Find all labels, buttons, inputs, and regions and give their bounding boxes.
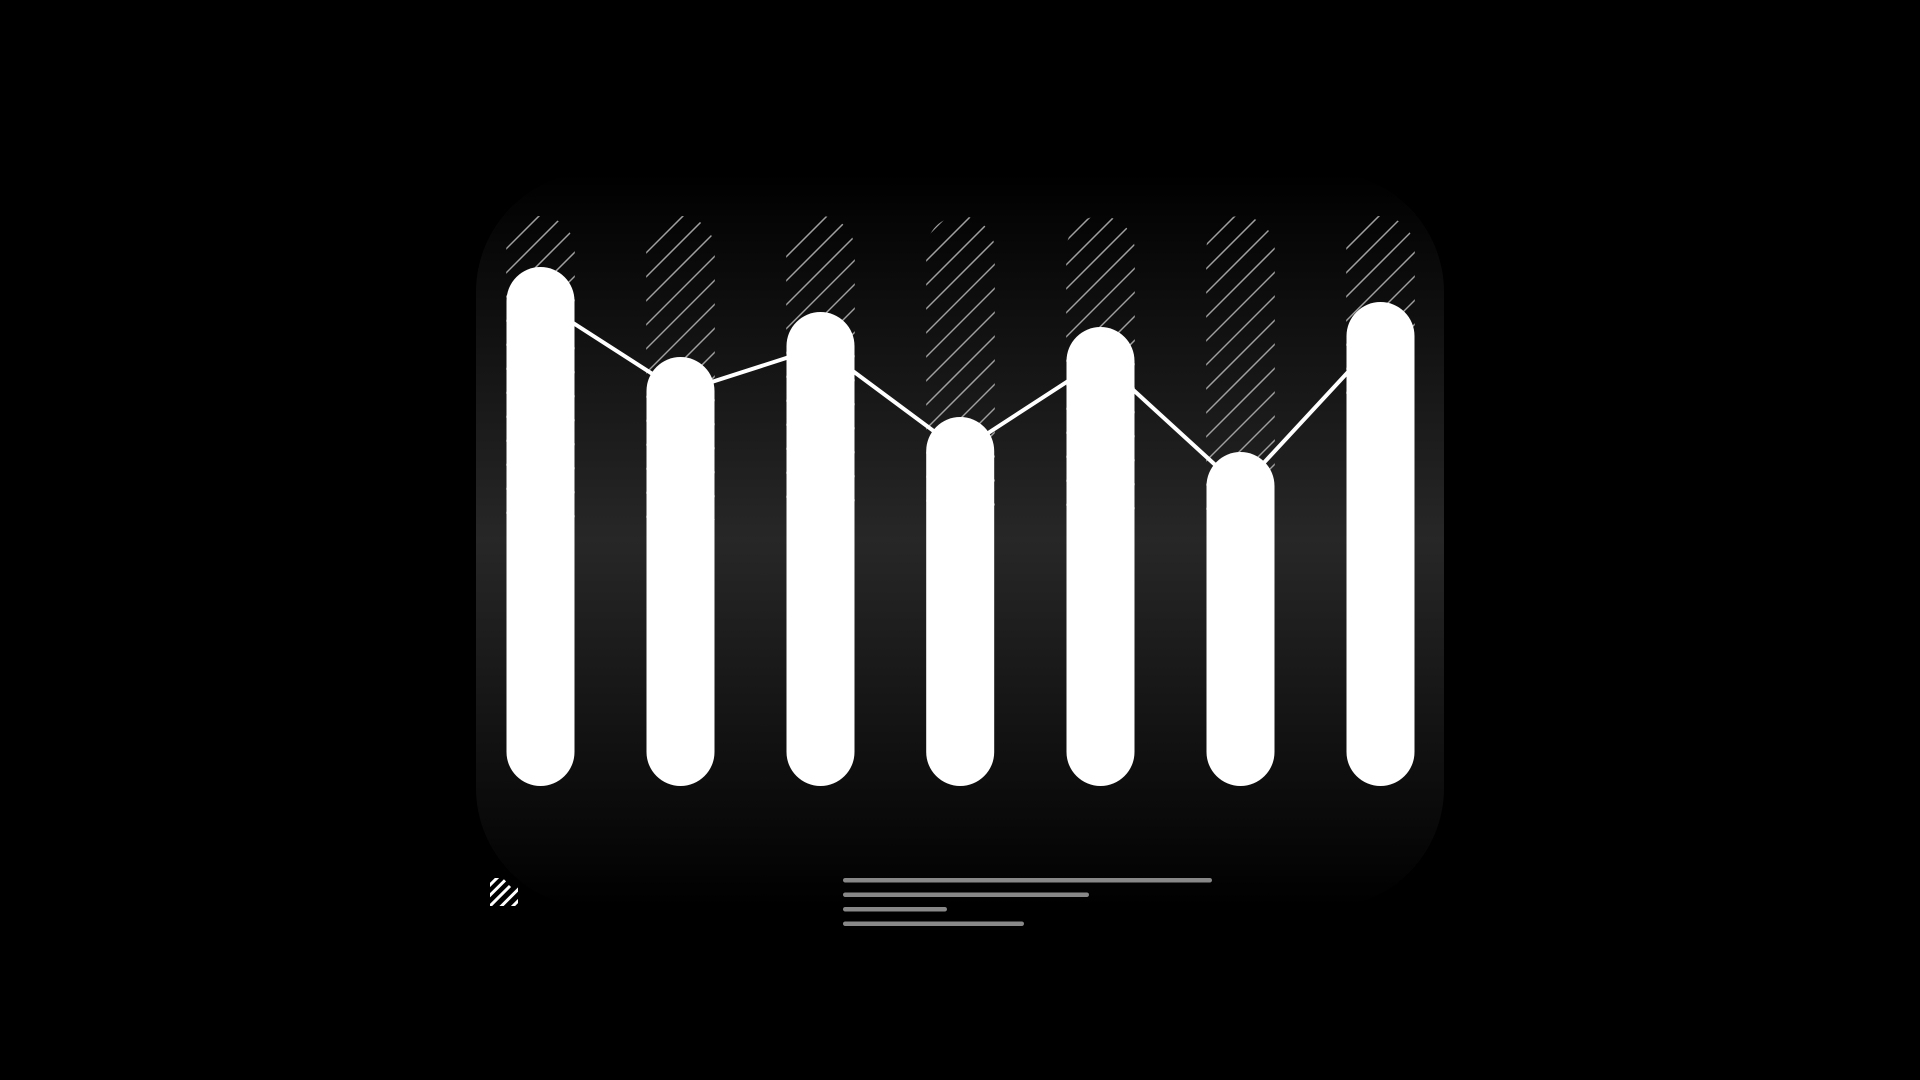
- bar group: [506, 267, 1414, 786]
- hatched target columns: [506, 216, 1415, 520]
- trend line: [540, 302, 1380, 488]
- infographic canvas: [476, 216, 1444, 926]
- icon: legend hatch swatch: [490, 878, 518, 906]
- panel: chart background: [476, 172, 1444, 908]
- legend placeholder text lines: [843, 878, 1212, 926]
